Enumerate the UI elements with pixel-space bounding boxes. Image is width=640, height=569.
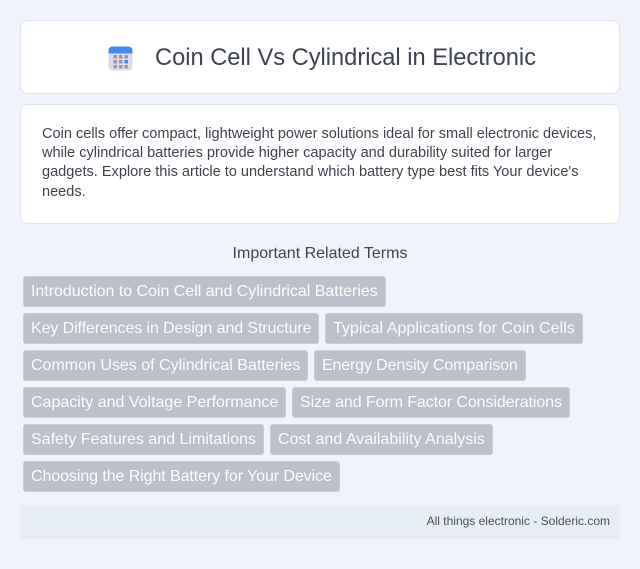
section heading: Important Related Terms: [233, 245, 407, 262]
intro text panel: [20, 104, 620, 224]
tag: Common Uses of Cylindrical Batteries: [31, 357, 300, 374]
tag: [270, 424, 493, 455]
intro paragraph: while cylindrical batteries provide higher capacity and durability suited for larger: [42, 145, 552, 161]
tag: [325, 313, 583, 344]
footer bar: All things electronic - Solderic.com: [427, 514, 610, 528]
footer bar: [20, 505, 620, 539]
tag: Safety Features and Limitations: [31, 431, 256, 448]
tag list: [23, 276, 583, 492]
intro paragraph: [42, 126, 596, 200]
tag: [314, 350, 526, 381]
tag: [23, 350, 308, 381]
tag: Cost and Availability Analysis: [278, 431, 485, 448]
tag: Energy Density Comparison: [322, 357, 518, 374]
intro paragraph: needs.: [42, 184, 86, 200]
tag: [292, 387, 570, 418]
tag: Choosing the Right Battery for Your Device: [31, 468, 332, 485]
tag: Size and Form Factor Considerations: [300, 394, 562, 411]
tag: Introduction to Coin Cell and Cylindrical Batteries: [31, 283, 378, 300]
tag: Typical Applications for Coin Cells: [333, 320, 575, 337]
header panel: [20, 20, 620, 94]
tag: [23, 276, 386, 307]
title: Coin Cell Vs Cylindrical in Electronic: [155, 45, 536, 71]
intro paragraph: Coin cells offer compact, lightweight power solutions ideal for small electronic devices,: [42, 126, 596, 142]
tag: Key Differences in Design and Structure: [31, 320, 311, 337]
tag: Capacity and Voltage Performance: [31, 394, 278, 411]
intro paragraph: gadgets. Explore this article to understand which battery type best fits Your device's: [42, 164, 578, 180]
tag: [23, 387, 286, 418]
icon: calendar: [108, 46, 132, 70]
tag: [23, 313, 319, 344]
tag: [23, 424, 264, 455]
tag: [23, 461, 340, 492]
